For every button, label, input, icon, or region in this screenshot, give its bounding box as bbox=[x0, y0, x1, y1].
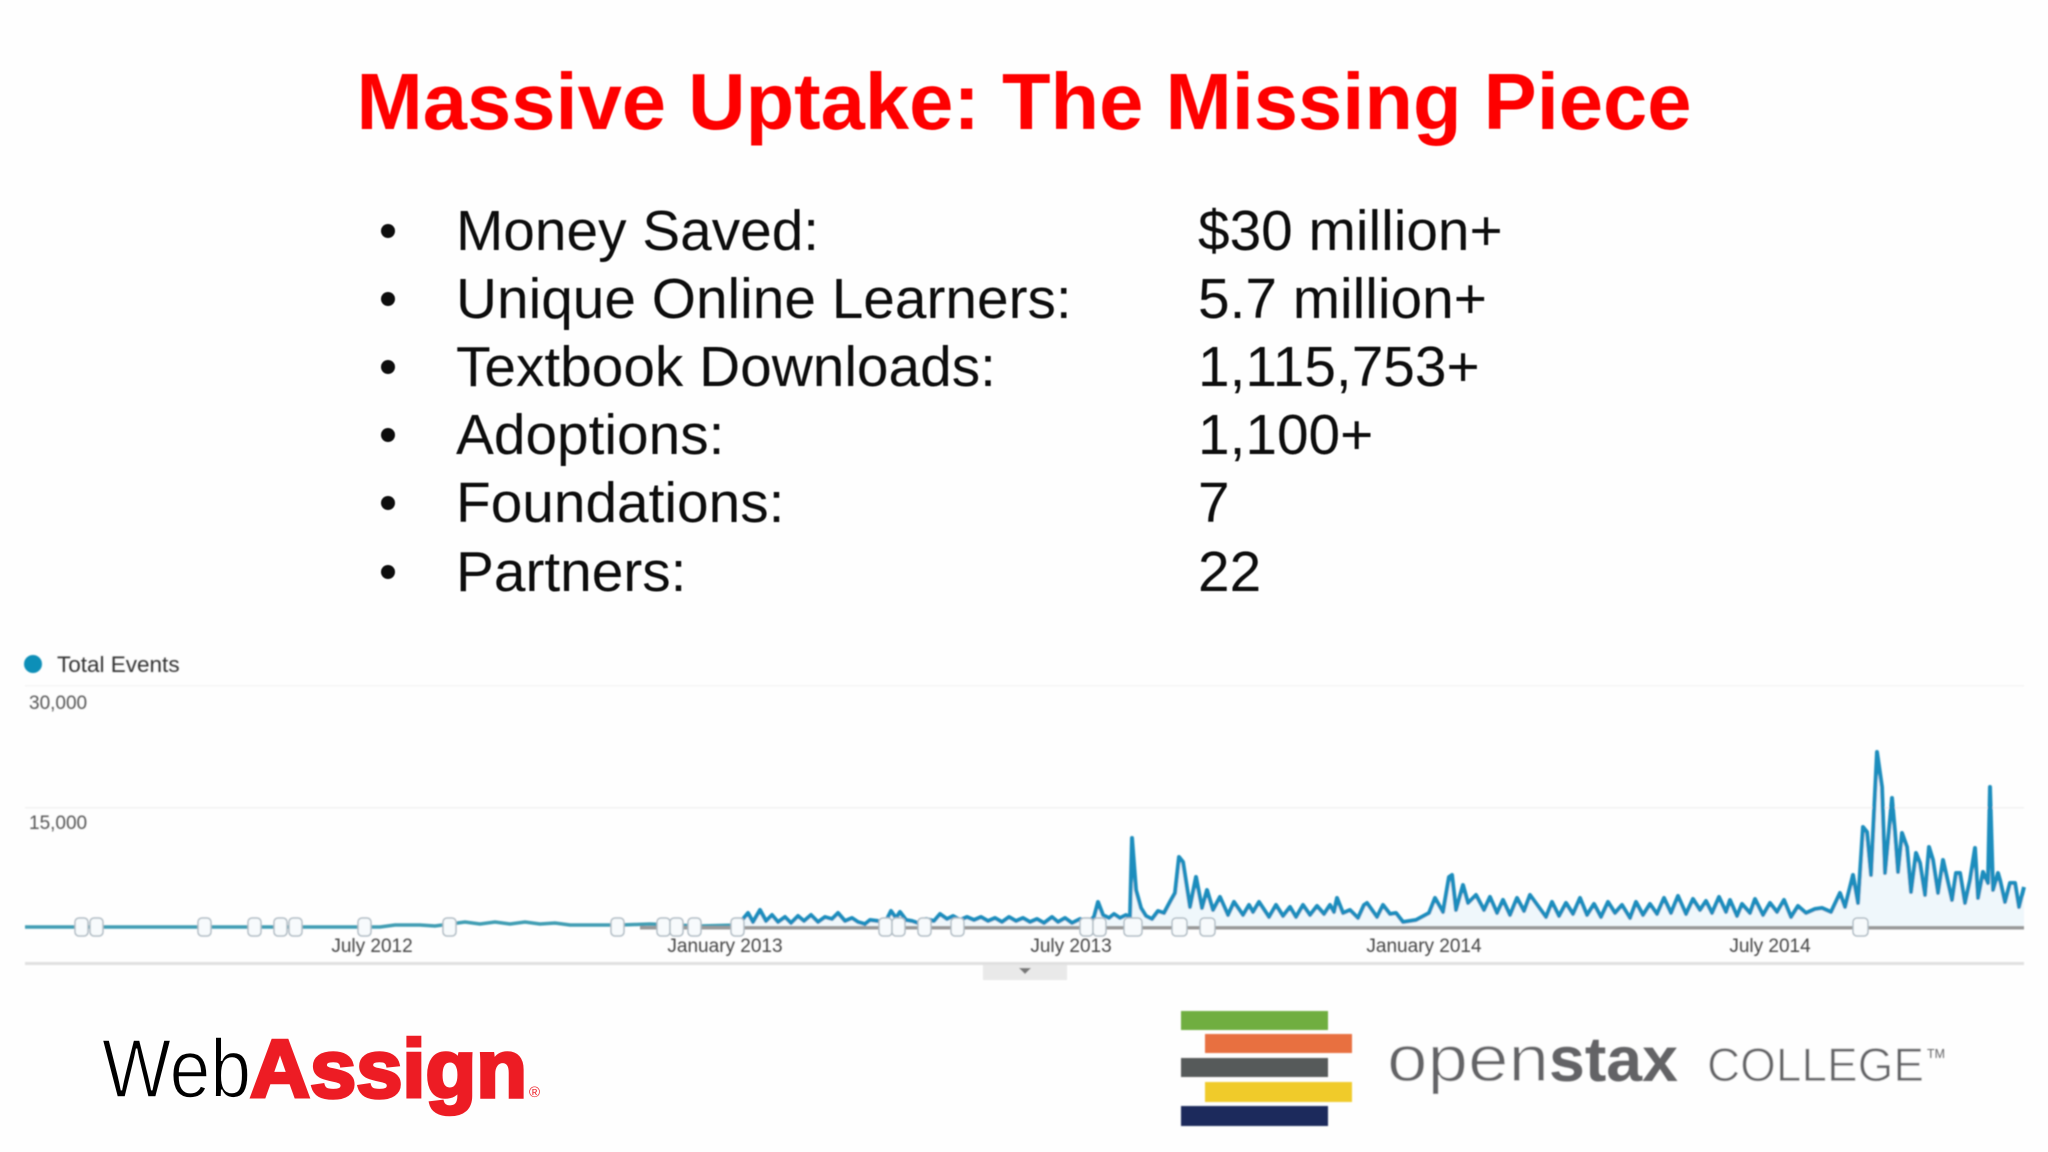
stat: adoptions: Adoptions: bbox=[456, 404, 724, 467]
stat: partners: 22 bbox=[1198, 541, 1261, 604]
stat: unique online learners: 5.7 million+ bbox=[1198, 268, 1487, 331]
stat: adoptions: 1,100+ bbox=[1198, 404, 1373, 467]
line chart: total events bbox=[24, 652, 2024, 980]
x axis labels bbox=[331, 936, 1811, 957]
stat: foundations bbox=[381, 472, 1230, 535]
wordmark bbox=[1387, 1022, 1945, 1095]
wordmark: open bbox=[1387, 1022, 1549, 1095]
logo: WebAssign: Web bbox=[102, 1022, 251, 1115]
stat: partners bbox=[381, 541, 1261, 604]
x axis labels: January 2014 bbox=[1366, 936, 1482, 957]
flat start of series bbox=[25, 922, 738, 927]
stat: textbook downloads bbox=[381, 336, 1480, 399]
y axis labels: 30,000 bbox=[29, 693, 87, 714]
stat: foundations: Foundations: bbox=[456, 472, 784, 535]
logo: WebAssign bbox=[102, 1022, 540, 1115]
x axis labels: July 2012 bbox=[331, 936, 413, 957]
stat: foundations: 7 bbox=[1198, 472, 1230, 535]
legend: Total Events bbox=[57, 652, 180, 677]
logo: WebAssign: ® bbox=[529, 1084, 540, 1101]
wordmark: COLLEGE bbox=[1707, 1038, 1924, 1091]
stat: unique online learners: Unique Online Learners: bbox=[456, 268, 1072, 331]
x axis labels: July 2013 bbox=[1030, 936, 1112, 957]
logo: WebAssign: Assign bbox=[250, 1024, 527, 1115]
x axis labels: July 2014 bbox=[1729, 936, 1811, 957]
stats list bbox=[381, 200, 1503, 604]
x axis labels: January 2013 bbox=[667, 936, 783, 957]
wordmark: stax bbox=[1549, 1025, 1678, 1095]
title: Massive Uptake: The Missing Piece bbox=[356, 57, 1692, 146]
y axis labels: 15,000 bbox=[29, 813, 87, 834]
stat: unique online learners bbox=[381, 268, 1487, 331]
stat: adoptions bbox=[381, 404, 1373, 467]
stat: partners: Partners: bbox=[456, 541, 686, 604]
annotation markers bbox=[75, 918, 1868, 936]
wordmark: TM bbox=[1927, 1046, 1945, 1061]
stat: money saved: Money Saved: bbox=[456, 200, 819, 263]
data line bbox=[738, 752, 2024, 925]
logo: OpenStax College bbox=[1181, 1011, 1945, 1126]
stat: money saved: $30 million+ bbox=[1198, 200, 1503, 263]
icon: stacked bars bbox=[1181, 1011, 1352, 1126]
stat: textbook downloads: 1,115,753+ bbox=[1198, 336, 1480, 399]
scroll tab bbox=[983, 965, 1067, 980]
baseline bbox=[640, 926, 2024, 930]
stat: textbook downloads: Textbook Downloads: bbox=[456, 336, 996, 399]
y axis labels bbox=[29, 693, 87, 834]
stat: money saved bbox=[381, 200, 1503, 263]
area fill bbox=[738, 752, 2024, 927]
